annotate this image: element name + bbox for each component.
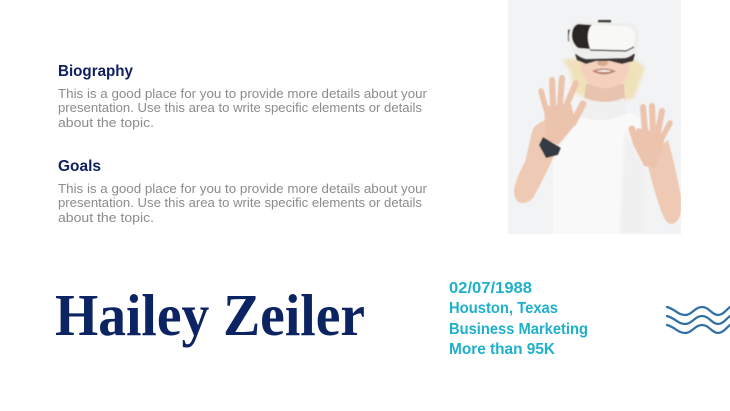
VR headset (575, 54, 635, 64)
details list (449, 280, 588, 358)
title: Hailey Zeiler: Hailey Zeiler (55, 282, 365, 348)
text block: goals description (58, 181, 428, 225)
mouth (592, 68, 616, 74)
heading: Goals: Goals (58, 158, 101, 175)
details list: Houston, Texas (449, 300, 558, 317)
text block: goals description: presentation. Use this area to write specific elements or details (58, 195, 422, 210)
left arm (514, 120, 554, 203)
text block: biography description: about the topic. (58, 115, 154, 130)
watch (539, 137, 561, 158)
hair (562, 58, 645, 102)
panel: biography (58, 63, 428, 130)
right hand (632, 106, 670, 145)
icon: waves (667, 307, 730, 333)
text block: biography description (58, 86, 428, 130)
details list: 02/07/1988 (449, 280, 532, 297)
text block: biography description: This is a good place for you to provide more details about your (58, 86, 428, 101)
text block: biography description: presentation. Use this area to write specific elements or details (58, 100, 422, 115)
text block: goals description: about the topic. (58, 210, 154, 225)
panel: goals (58, 158, 428, 225)
neck (584, 84, 625, 104)
photo: woman wearing VR headset (508, 0, 681, 234)
heading: Biography: Biography (58, 63, 133, 80)
right forearm (648, 140, 681, 224)
face (580, 60, 630, 88)
top (554, 146, 562, 157)
text block: goals description: This is a good place for you to provide more details about your (58, 181, 428, 196)
nose (597, 60, 608, 66)
details list: Business Marketing (449, 321, 588, 338)
details list: More than 95K (449, 341, 556, 358)
left hand (541, 78, 583, 123)
